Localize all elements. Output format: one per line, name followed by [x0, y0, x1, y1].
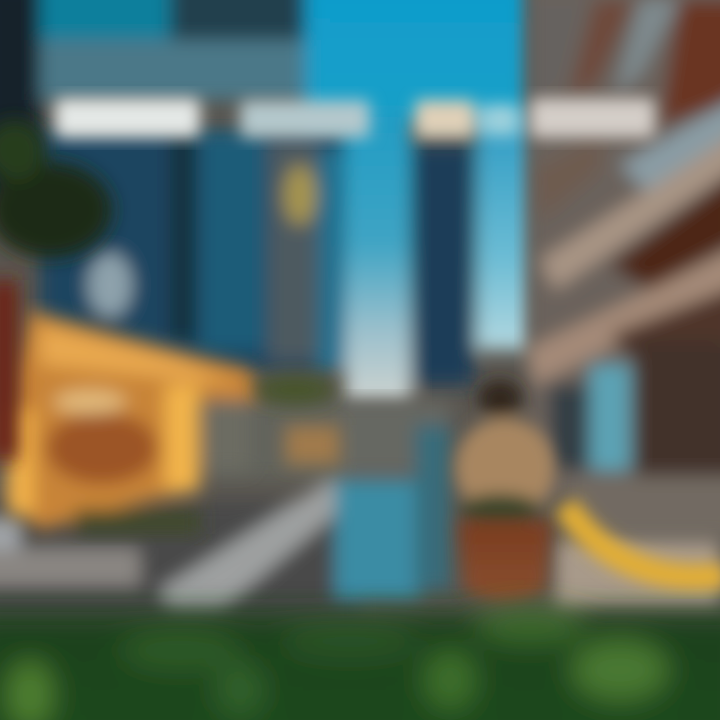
right building with balconies — [525, 0, 720, 538]
background: towers and sky — [0, 0, 531, 405]
headline text blur — [55, 98, 655, 138]
orange pavilion — [5, 310, 340, 534]
palm tree — [0, 120, 335, 460]
person with pot — [455, 380, 555, 602]
foreground foliage — [0, 607, 720, 720]
yellow curved stripe — [565, 505, 720, 577]
street and water — [0, 400, 720, 620]
